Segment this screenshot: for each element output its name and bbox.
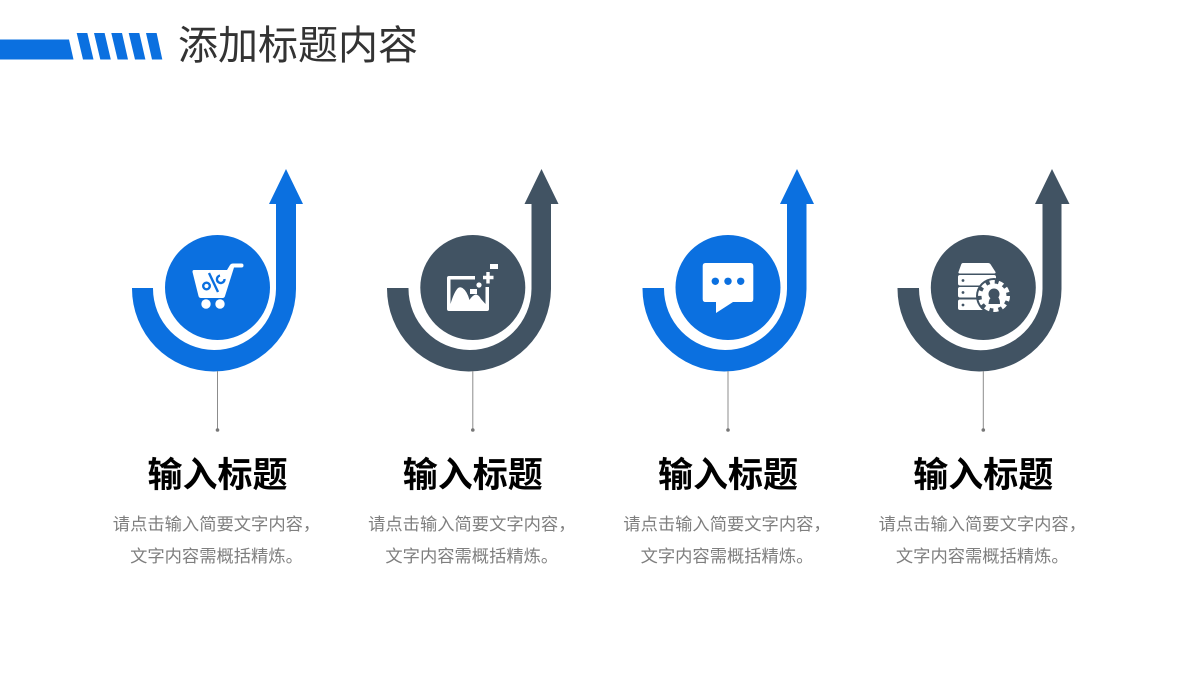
description 4: 文字内容需概括精炼。	[896, 546, 1069, 566]
circle 1	[165, 235, 270, 340]
heading 2: 输入标题	[403, 456, 543, 495]
circle 3	[676, 235, 780, 340]
description 1: 文字内容需概括精炼。	[130, 546, 303, 566]
description 4	[879, 514, 1086, 566]
description 2: 文字内容需概括精炼。	[385, 546, 558, 566]
description 3: 文字内容需概括精炼。	[641, 546, 813, 566]
title: 添加标题内容	[178, 24, 418, 68]
icon: shopping cart with percent	[192, 264, 244, 309]
arrow 3	[642, 169, 814, 372]
item 3 graphic	[642, 169, 814, 432]
circle 2	[420, 235, 525, 340]
text block 3	[623, 456, 831, 566]
description 1: 请点击输入简要文字内容，	[113, 514, 320, 534]
icon: image with plus	[447, 264, 498, 311]
connector line 2	[471, 371, 475, 432]
text block 1	[113, 456, 320, 566]
text block 4	[879, 456, 1086, 566]
heading 1: 输入标题	[147, 456, 288, 495]
arrow 2	[387, 169, 558, 372]
description 2: 请点击输入简要文字内容，	[368, 514, 575, 534]
description 3	[623, 514, 831, 566]
description 1	[113, 514, 320, 566]
description 3: 请点击输入简要文字内容，	[623, 514, 831, 534]
arrow 4	[897, 169, 1070, 372]
heading 3: 输入标题	[658, 456, 798, 495]
icon: server with gear	[958, 263, 1012, 314]
item 4 graphic	[897, 169, 1070, 432]
text block 2	[368, 456, 575, 566]
connector line 1	[216, 371, 219, 432]
connector line 4	[982, 371, 985, 432]
item 2 graphic	[387, 169, 558, 432]
arrow 1	[132, 169, 303, 372]
connector line 3	[726, 371, 730, 432]
description 2	[368, 514, 575, 566]
description 4: 请点击输入简要文字内容，	[879, 514, 1086, 534]
circle 4	[931, 235, 1036, 340]
icon: speech bubble	[703, 263, 753, 313]
heading 4: 输入标题	[913, 456, 1053, 495]
item 1 graphic	[132, 169, 303, 432]
header accent: bar and stripes	[0, 33, 162, 60]
